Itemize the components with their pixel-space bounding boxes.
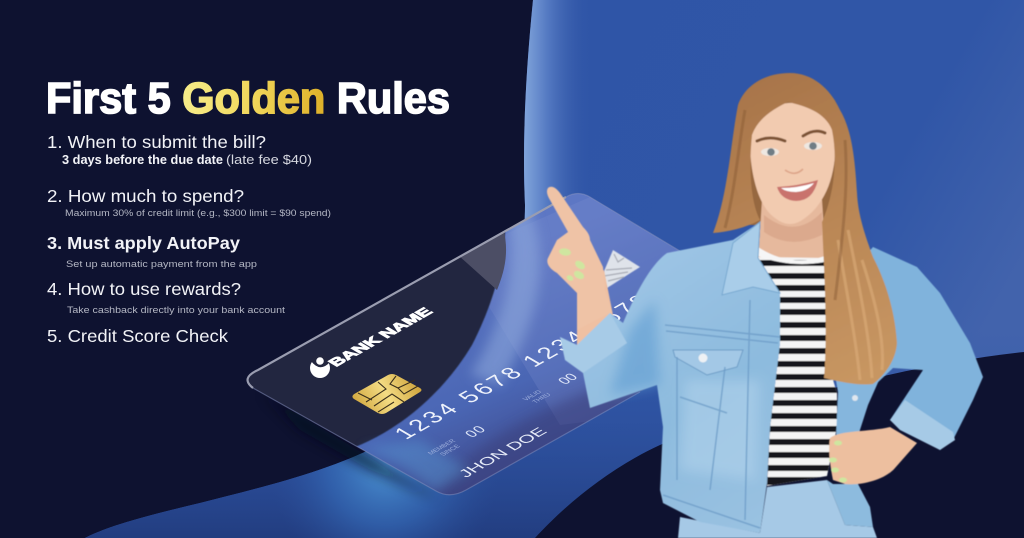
jacket left cuff xyxy=(560,313,627,373)
jacket left body and sleeve xyxy=(560,222,780,533)
member since label xyxy=(427,438,465,460)
rule 1 late fee: (late fee $40) xyxy=(226,152,312,167)
bank name: BANK NAME xyxy=(325,305,437,369)
dark wave bottom right xyxy=(535,352,1024,538)
hip nails xyxy=(829,440,847,482)
card shadow xyxy=(262,392,440,500)
card number: 1234 5678 1234 5678 xyxy=(388,291,656,443)
hair highlights xyxy=(838,230,883,380)
credit card xyxy=(246,193,680,496)
jacket right front xyxy=(835,375,880,438)
jacket right sleeve xyxy=(826,247,983,450)
rule 5 heading: 5. Credit Score Check xyxy=(47,326,228,346)
cardholder name: JHON DOE xyxy=(455,425,551,480)
hair xyxy=(713,73,897,385)
valid thru label xyxy=(522,388,553,406)
jacket hem right xyxy=(827,480,873,527)
rule 1 heading: 1. When to submit the bill? xyxy=(47,132,266,152)
jacket pocket flap xyxy=(673,350,743,375)
raised hand xyxy=(547,187,612,330)
member since label: SINCE xyxy=(439,444,463,457)
chip xyxy=(352,374,422,414)
rule 1 detail: 3 days before the due date xyxy=(62,153,223,167)
jacket right cuff xyxy=(890,400,955,450)
eyebrows xyxy=(757,131,825,141)
rule 3 heading: 3. Must apply AutoPay xyxy=(47,233,240,253)
member since value: 00 xyxy=(461,423,490,440)
jacket light patch xyxy=(680,380,760,480)
hologram strip xyxy=(602,250,640,288)
card body xyxy=(248,194,679,495)
jacket collar xyxy=(722,222,780,295)
card lower edge xyxy=(253,194,700,495)
rule 2 detail: Maximum 30% of credit limit (e.g., $300 limit = $90 spend) xyxy=(65,208,331,219)
rule 4 heading: 4. How to use rewards? xyxy=(47,279,241,299)
rule 3 detail: Set up automatic payment from the app xyxy=(66,259,257,270)
jacket button xyxy=(852,395,858,401)
neck xyxy=(758,200,826,262)
mouth xyxy=(777,180,818,201)
bank logo xyxy=(310,355,330,378)
neck shadow xyxy=(764,212,822,242)
rule 2 heading: 2. How much to spend? xyxy=(47,186,244,206)
t-shirt neckline xyxy=(758,247,825,264)
valid thru label: THRU xyxy=(531,392,553,405)
jacket seams xyxy=(663,300,780,528)
card outline xyxy=(248,197,566,388)
jeans xyxy=(678,480,877,538)
valid thru label: VALID xyxy=(522,389,544,402)
face xyxy=(750,103,836,224)
title: First 5 Golden Rules xyxy=(46,74,450,123)
back hair xyxy=(740,100,845,225)
rules list xyxy=(47,132,331,346)
pocket button xyxy=(698,354,708,362)
hand on hip xyxy=(829,427,917,484)
woman xyxy=(547,73,983,538)
teeth xyxy=(781,183,814,192)
nails xyxy=(558,248,587,282)
member since label: MEMBER xyxy=(427,438,458,456)
t-shirt xyxy=(758,256,838,487)
forearm xyxy=(577,270,614,352)
rule 4 detail: Take cashback directly into your bank account xyxy=(67,305,285,316)
eyes xyxy=(761,142,822,156)
nose xyxy=(785,169,803,173)
hair shadows xyxy=(725,110,846,300)
sleeve crease shadow xyxy=(610,300,660,395)
valid thru value: 00 xyxy=(554,371,581,387)
